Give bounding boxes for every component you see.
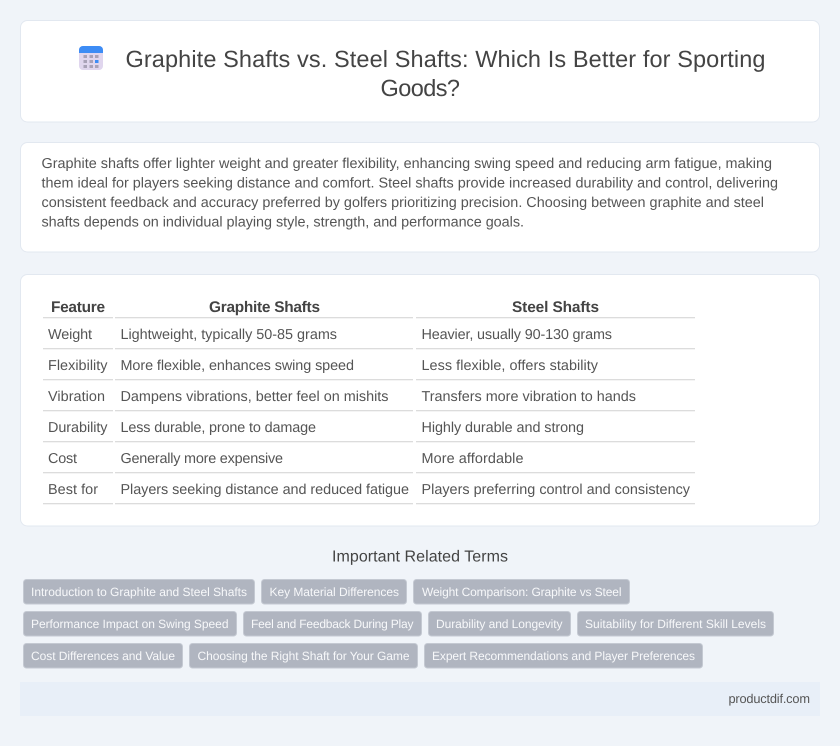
- title: Graphite Shafts vs. Steel Shafts: Which Is Better for Sporting: [126, 46, 766, 72]
- tag list: related terms: Expert Recommendations and Player Preferences: [432, 649, 695, 663]
- tag list: related terms: Key Material Differences: [270, 585, 399, 599]
- row: durability: [48, 420, 584, 436]
- tag list: related terms: Cost Differences and Value: [31, 649, 175, 663]
- tag list: related terms: Feel and Feedback During Play: [251, 617, 414, 631]
- row: durability: Less durable, prone to damage: [120, 420, 316, 436]
- row: best for: [48, 482, 691, 498]
- footer: [20, 682, 820, 716]
- row: weight: Lightweight, typically 50-85 grams: [120, 327, 337, 343]
- row: cost: More affordable: [422, 451, 524, 467]
- row: flexibility: [48, 358, 599, 374]
- row: vibration: Vibration: [48, 389, 105, 405]
- text block: summary paragraph: them ideal for players seeking distance and comfort. Steel shafts provide increased durability and control, delivering: [42, 176, 778, 192]
- tag list: related terms: Performance Impact on Swing Speed: [31, 617, 228, 631]
- tag list: related terms: Suitability for Different Skill Levels: [585, 617, 766, 631]
- row: best for: Players seeking distance and reduced fatigue: [120, 482, 409, 498]
- table header: Feature: [51, 299, 105, 316]
- row: weight: Weight: [48, 327, 92, 343]
- table header: Steel Shafts: [512, 299, 599, 316]
- heading: related terms: Important Related Terms: [332, 548, 508, 566]
- row: cost: Generally more expensive: [120, 451, 283, 467]
- panel: header: [20, 20, 820, 122]
- panel: comparison table: [20, 274, 820, 526]
- row: durability: Highly durable and strong: [422, 420, 584, 436]
- panel: summary: [20, 142, 820, 252]
- tag list: related terms: Durability and Longevity: [436, 617, 562, 631]
- footer: productdif.com: [728, 691, 810, 706]
- text block: summary paragraph: shafts depends on individual playing style, strength, and performance goals.: [42, 214, 524, 230]
- text block: summary paragraph: [42, 156, 778, 230]
- title: [126, 46, 766, 101]
- row: best for: Best for: [48, 482, 98, 498]
- tag list: related terms: [24, 580, 774, 668]
- row: cost: Cost: [48, 451, 77, 467]
- row: durability: Durability: [48, 420, 108, 436]
- tag list: related terms: Choosing the Right Shaft for Your Game: [198, 649, 410, 663]
- table header: [51, 299, 599, 316]
- title: Goods?: [380, 75, 460, 101]
- row: weight: Heavier, usually 90-130 grams: [422, 327, 612, 343]
- row: flexibility: Less flexible, offers stability: [422, 358, 599, 374]
- icon: calendar: [79, 46, 103, 70]
- row: cost: [48, 451, 524, 467]
- row: vibration: Transfers more vibration to hands: [422, 389, 636, 405]
- table header: Graphite Shafts: [209, 299, 320, 316]
- tag list: related terms: Weight Comparison: Graphite vs Steel: [422, 585, 622, 599]
- row: weight: [48, 327, 612, 343]
- row: best for: Players preferring control and consistency: [422, 482, 691, 498]
- text block: summary paragraph: Graphite shafts offer lighter weight and greater flexibility, enhancing swing speed and reducing arm fatigue, making: [42, 156, 772, 172]
- text block: summary paragraph: consistent feedback and accuracy preferred by golfers prioritizing precision. Choosing between graphite and steel: [42, 195, 764, 211]
- row: vibration: [48, 389, 636, 405]
- tag list: related terms: Introduction to Graphite and Steel Shafts: [31, 585, 247, 599]
- row: flexibility: More flexible, enhances swing speed: [120, 358, 354, 374]
- row: flexibility: Flexibility: [48, 358, 108, 374]
- row: vibration: Dampens vibrations, better feel on mishits: [120, 389, 388, 405]
